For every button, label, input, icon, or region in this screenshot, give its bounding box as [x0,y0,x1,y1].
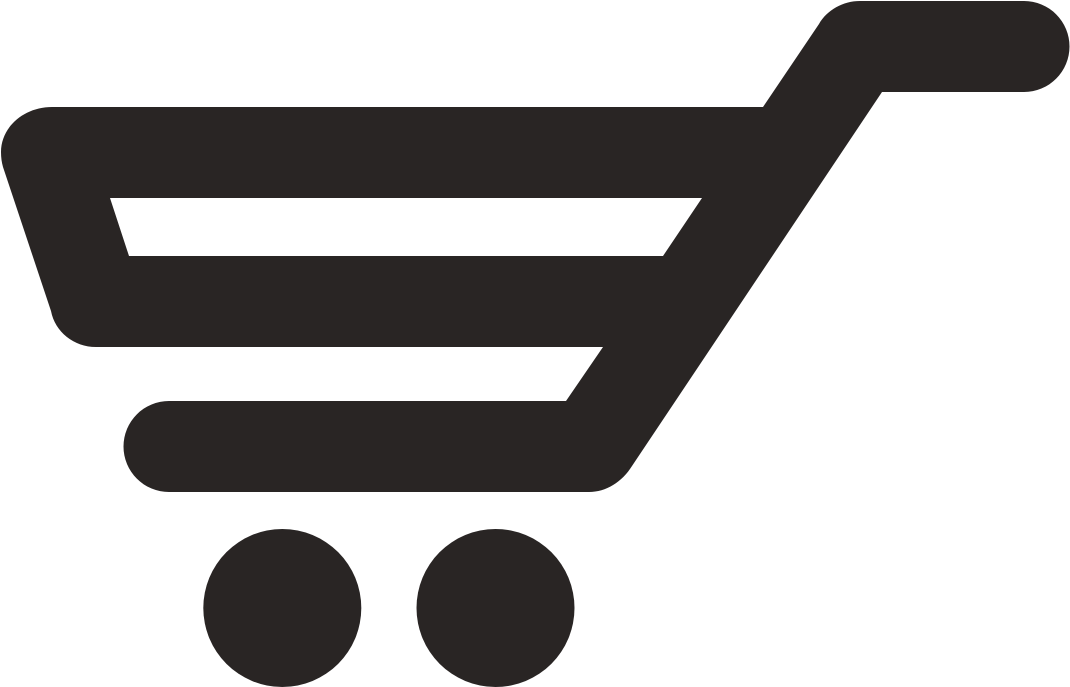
left wheel [203,529,361,687]
cart frame [1,1,1070,492]
right wheel [416,529,574,687]
